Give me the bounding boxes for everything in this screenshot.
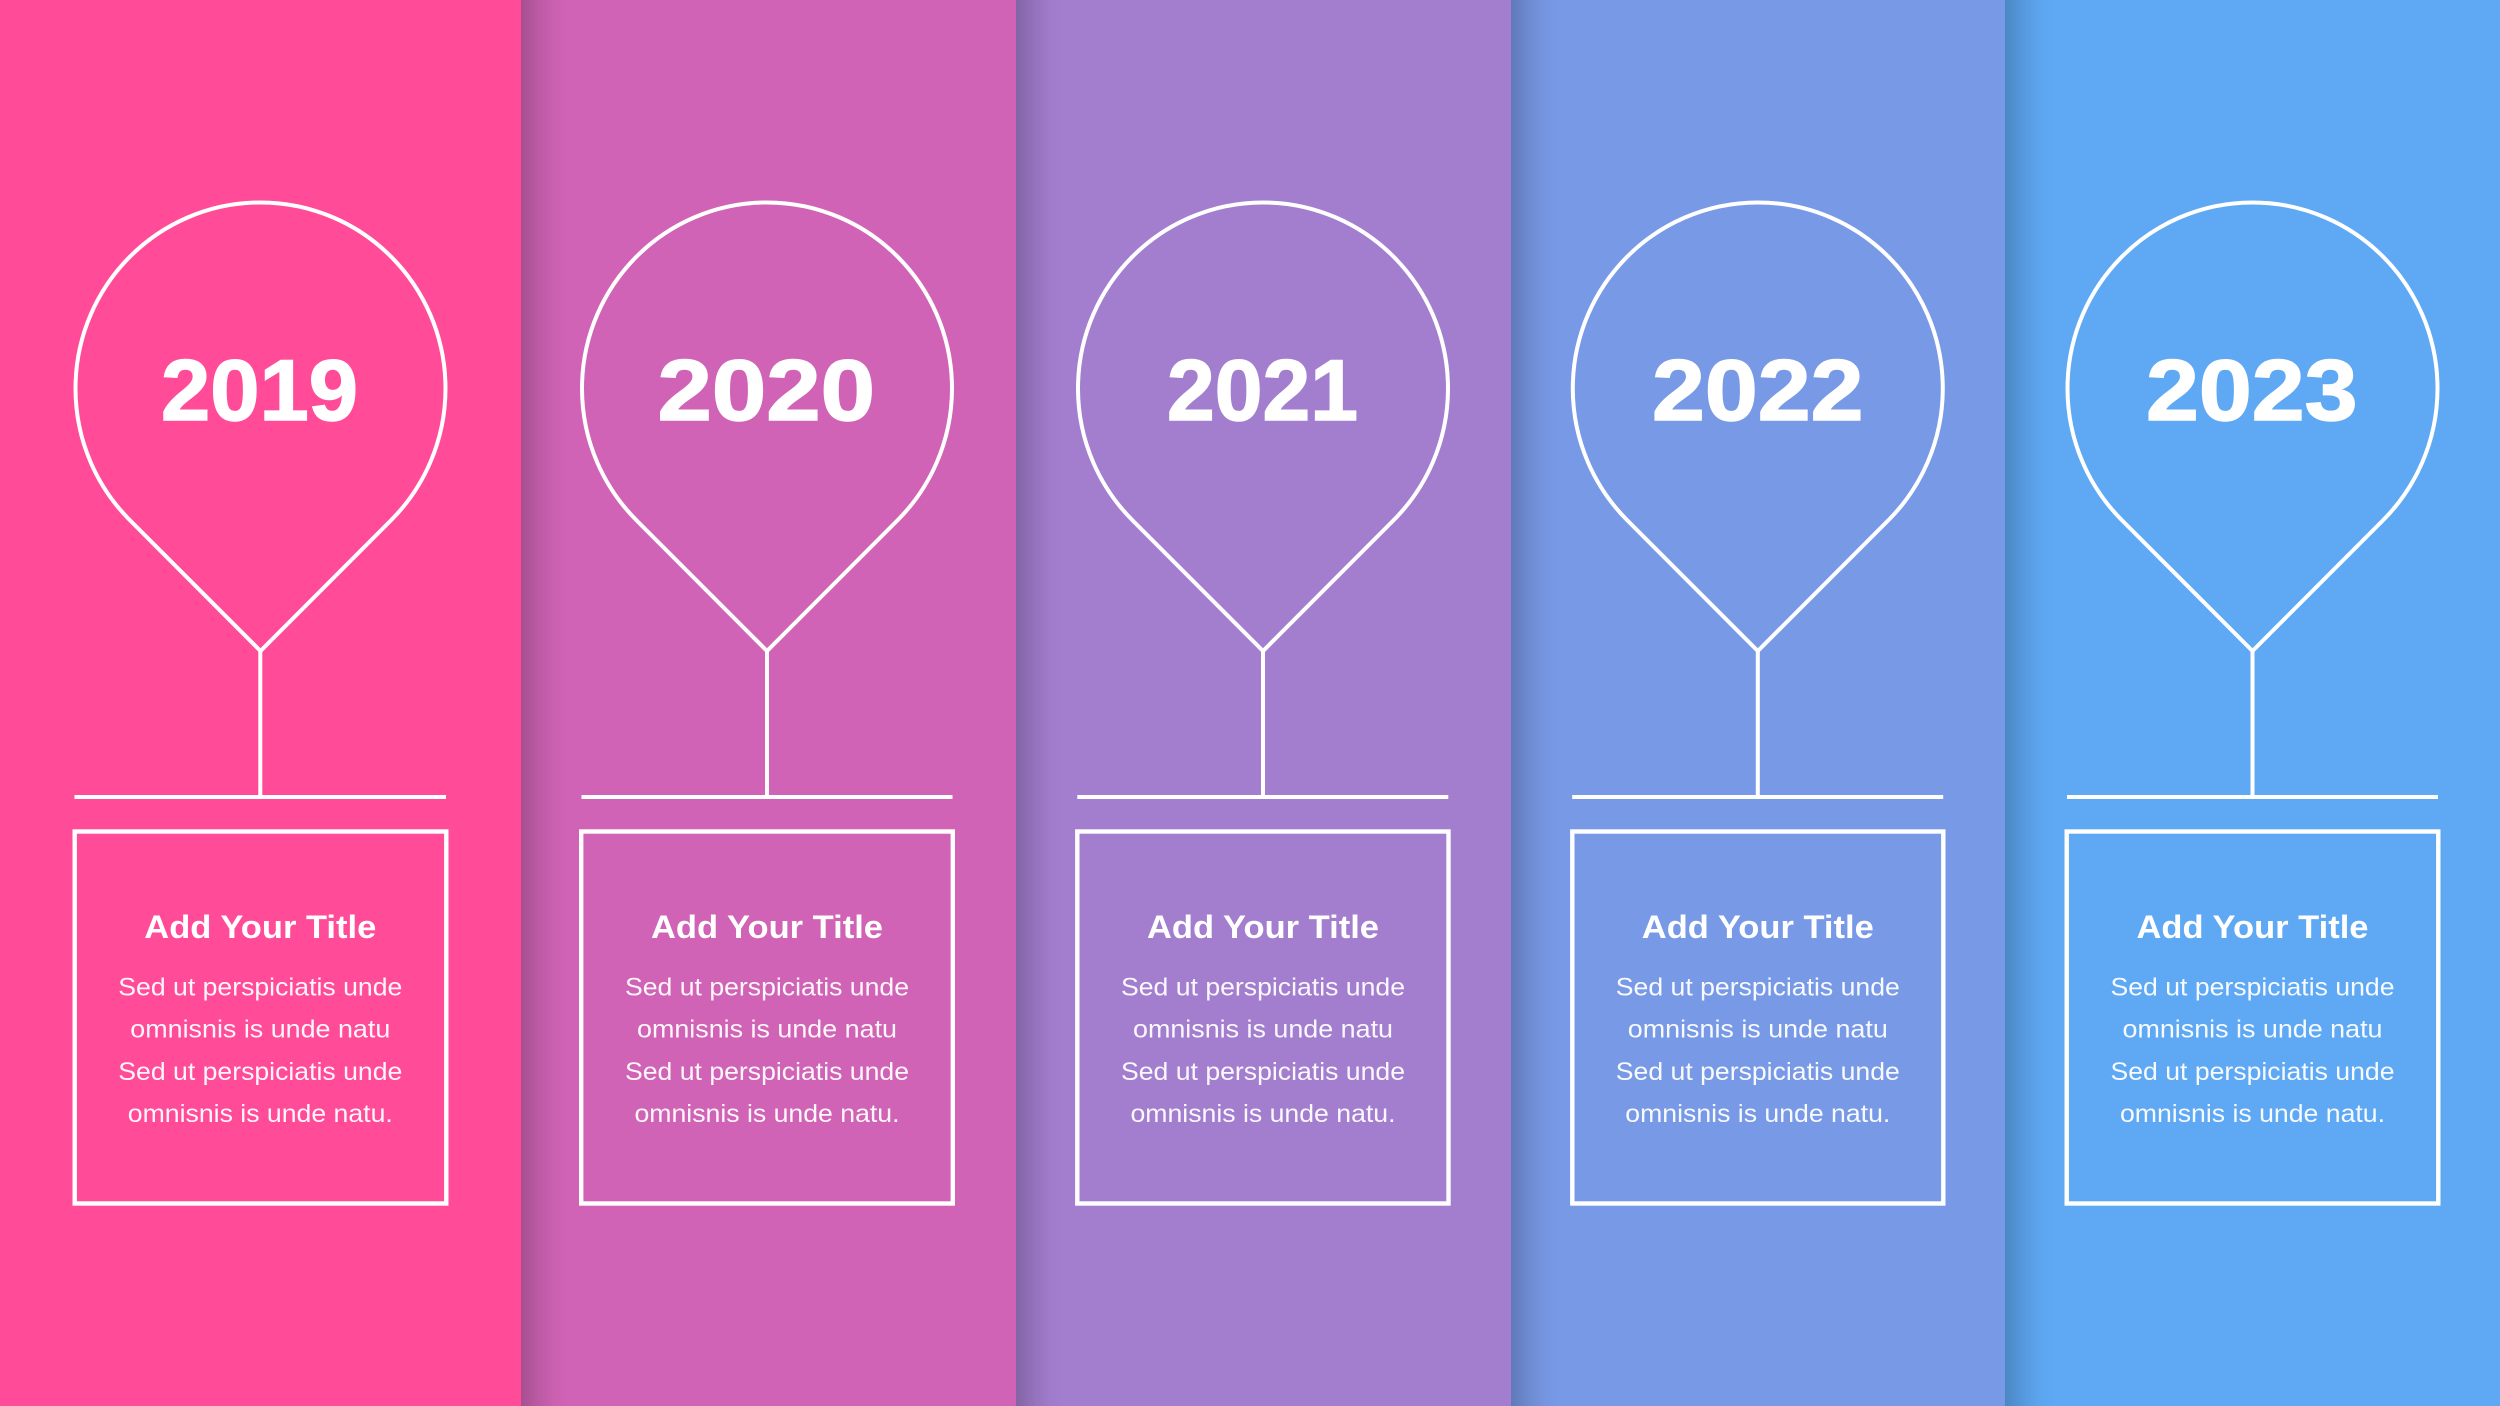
box body: 2019: omnisnis is unde natu [130, 1016, 390, 1044]
box title: 2021: Add Your Title [1147, 909, 1379, 945]
box title: 2020: Add Your Title [651, 909, 883, 945]
box body: 2022: omnisnis is unde natu. [1625, 1100, 1890, 1128]
box title: 2023: Add Your Title [2136, 909, 2368, 945]
box body: 2023 [2110, 974, 2394, 1128]
box body: 2020: omnisnis is unde natu [637, 1016, 897, 1044]
panel: 2020 [521, 0, 1016, 1406]
box body: 2022: Sed ut perspiciatis unde [1616, 974, 1900, 1002]
baseline rule: 2021 [1077, 795, 1448, 799]
box body: 2021: Sed ut perspiciatis unde [1121, 1058, 1405, 1086]
panel: 2021 [1016, 0, 1511, 1406]
panel: 2022 [1511, 0, 2005, 1406]
year: 2022: 2022 [1652, 343, 1864, 439]
box body: 2021: omnisnis is unde natu [1133, 1016, 1393, 1044]
box body: 2021: omnisnis is unde natu. [1130, 1100, 1396, 1128]
pin: 2023 [2068, 202, 2438, 651]
pin: 2019 [76, 202, 445, 651]
text box: 2022 [1572, 832, 1943, 1204]
box body: 2023: Sed ut perspiciatis unde [2110, 1058, 2394, 1086]
box body: 2019: omnisnis is unde natu. [128, 1100, 393, 1128]
box title: 2019: Add Your Title [144, 909, 376, 945]
box body: 2020: Sed ut perspiciatis unde [625, 974, 909, 1002]
box body: 2019: Sed ut perspiciatis unde [118, 1058, 402, 1086]
box body: 2021 [1121, 974, 1405, 1128]
connector stem: 2022 [1756, 651, 1760, 797]
panel: 2023 [2005, 0, 2500, 1406]
baseline rule: 2023 [2067, 795, 2438, 799]
box body: 2022: omnisnis is unde natu [1628, 1016, 1888, 1044]
connector stem: 2021 [1261, 651, 1265, 797]
box body: 2020: omnisnis is unde natu. [634, 1100, 900, 1128]
box body: 2019 [118, 974, 402, 1128]
year: 2019: 2019 [161, 343, 358, 439]
box body: 2019: Sed ut perspiciatis unde [118, 974, 402, 1002]
connector stem: 2023 [2250, 651, 2254, 797]
box title: 2022: Add Your Title [1642, 909, 1874, 945]
box body: 2021: Sed ut perspiciatis unde [1121, 974, 1405, 1002]
text box: 2020 [581, 832, 953, 1204]
text box: 2019 [75, 832, 446, 1204]
box body: 2023: omnisnis is unde natu. [2120, 1100, 2385, 1128]
box body: 2023: Sed ut perspiciatis unde [2110, 974, 2394, 1002]
baseline rule: 2019 [74, 795, 446, 799]
connector stem: 2020 [765, 651, 769, 797]
text box: 2021 [1077, 832, 1448, 1204]
box body: 2020 [625, 974, 909, 1128]
pin: 2022 [1573, 202, 1943, 651]
year: 2020: 2020 [658, 343, 875, 439]
box body: 2022 [1616, 974, 1900, 1128]
connector stem: 2019 [258, 651, 262, 797]
box body: 2020: Sed ut perspiciatis unde [625, 1058, 909, 1086]
text box: 2023 [2067, 832, 2438, 1204]
pin: 2020 [582, 202, 952, 651]
panel: 2019 [0, 0, 521, 1406]
baseline rule: 2020 [582, 795, 952, 799]
baseline rule: 2022 [1572, 795, 1943, 799]
pin: 2021 [1078, 202, 1448, 651]
year: 2021: 2021 [1167, 343, 1358, 439]
year: 2023: 2023 [2146, 343, 2358, 439]
box body: 2023: omnisnis is unde natu [2122, 1016, 2382, 1044]
box body: 2022: Sed ut perspiciatis unde [1616, 1058, 1900, 1086]
